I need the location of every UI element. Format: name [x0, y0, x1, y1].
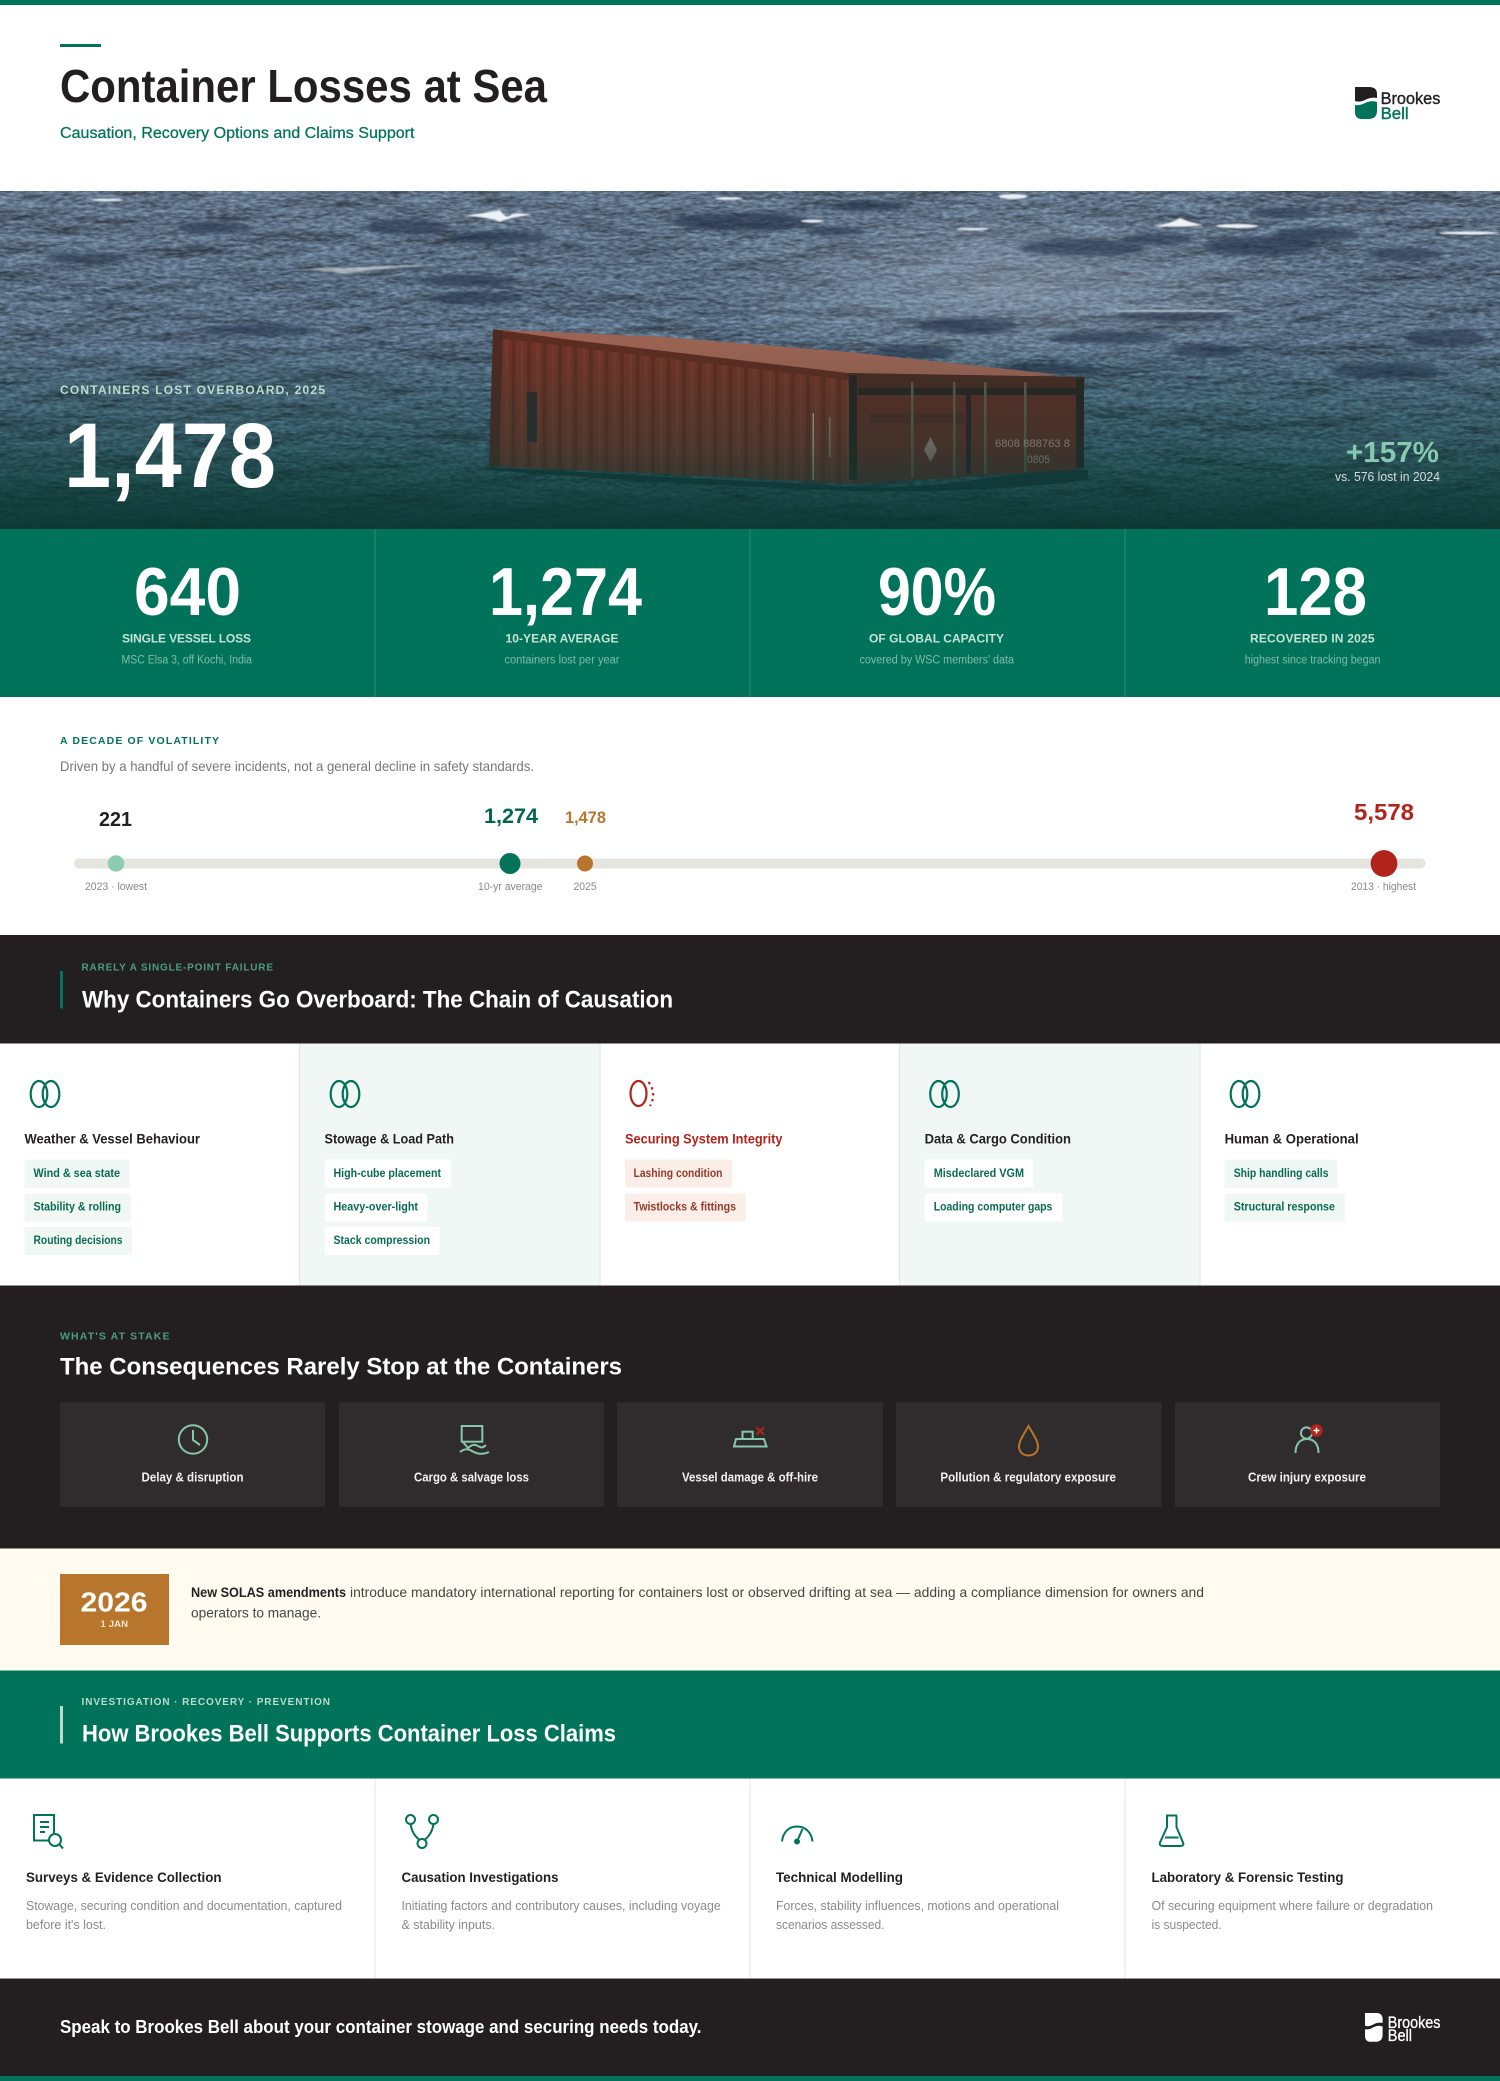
- service: laboratory and forensic testing: Of securing equipment where failure or degradation: [1152, 1898, 1433, 1913]
- heading: Why Containers Go Overboard: The Chain of Causation: [82, 986, 673, 1014]
- stat: single vessel loss: [122, 554, 253, 666]
- container: 0805: [1027, 454, 1050, 466]
- footer: [0, 1978, 1500, 2076]
- callout text: [191, 1584, 1204, 1620]
- sea grain: [0, 191, 1500, 529]
- logo: Brookes Bell white: Bell: [1388, 2027, 1412, 2045]
- marker: 2023 lowest: [85, 809, 147, 893]
- change note: vs. 576 lost in 2024: [1335, 469, 1440, 484]
- call to action: Speak to Brookes Bell about your container stowage and securing needs today.: [60, 2017, 702, 2037]
- service: surveys and evidence: Surveys & Evidence Collection: [26, 1869, 222, 1885]
- hero stat: year-on-year change: [1335, 437, 1440, 484]
- hero stat: containers lost overboard: [60, 383, 325, 507]
- top accent bar: [0, 0, 1500, 5]
- icon: clock: [179, 1425, 207, 1454]
- door centre gap: [966, 392, 971, 474]
- change figure: +157%: [1346, 437, 1439, 469]
- column: securing system integrity: Lashing condition: [634, 1168, 722, 1180]
- hero label: CONTAINERS LOST OVERBOARD, 2025: [60, 383, 325, 397]
- eyebrow: RARELY A SINGLE-POINT FAILURE: [82, 962, 273, 974]
- column: data and cargo condition: Loading computer gaps: [934, 1202, 1052, 1214]
- panel: decade of volatility: [60, 735, 1426, 893]
- panel: services: [0, 1778, 1500, 1978]
- card: cargo and salvage loss: [339, 1402, 604, 1507]
- corner post: [489, 329, 503, 466]
- service: causation investigations: Initiating factors and contributory causes, including voyage: [402, 1898, 721, 1913]
- card: crew injury exposure: [1175, 1402, 1440, 1507]
- column: securing system integrity: Twistlocks & fittings: [634, 1202, 736, 1214]
- stat: global capacity: covered by WSC members' data: [860, 654, 1015, 666]
- column: human and operational: Ship handling calls: [1234, 1168, 1328, 1180]
- callout text: introduce mandatory international reporting for containers lost or observed drifting at sea — adding a compliance dimension for owners and: [350, 1584, 1204, 1600]
- corner castings: [849, 375, 1084, 480]
- header accent bar: [60, 971, 63, 1008]
- service: surveys and evidence: [26, 1815, 342, 1932]
- card: crew injury exposure: Crew injury exposure: [1248, 1470, 1366, 1484]
- hero number: 1,478: [64, 405, 276, 507]
- marker: 2013 highest: [1351, 799, 1416, 893]
- container side wall: [489, 329, 852, 484]
- service: surveys and evidence: Stowage, securing condition and documentation, captured: [26, 1898, 342, 1913]
- marker: 10-year average: 1,274: [484, 804, 538, 828]
- stat: 10-year average: 1,274: [489, 554, 642, 630]
- stat: single vessel loss: 640: [134, 554, 241, 630]
- service: causation investigations: & stability inputs.: [402, 1917, 495, 1932]
- column: weather and vessel behaviour: [24, 1081, 201, 1255]
- icon: damaged vessel: [734, 1428, 766, 1446]
- door header: [848, 373, 1084, 389]
- column: human and operational: Human & Operational: [1225, 1130, 1359, 1146]
- marker: 2013 highest: 5,578: [1354, 799, 1414, 825]
- column: stowage and load path: Stowage & Load Path: [324, 1130, 454, 1146]
- door panel shade: [870, 413, 965, 423]
- door bar: [858, 388, 1078, 395]
- icon: document with magnifier: [34, 1815, 63, 1848]
- marker: 2013 highest: 2013 · highest: [1351, 881, 1416, 893]
- waterline: [489, 468, 1088, 492]
- column: human and operational: [1225, 1081, 1359, 1222]
- column: data and cargo condition: Misdeclared VGM: [934, 1168, 1024, 1180]
- stat: recovered: RECOVERED IN 2025: [1250, 632, 1375, 646]
- callout text: operators to manage.: [191, 1604, 321, 1620]
- section header: chain of causation: [0, 935, 1500, 1044]
- logo: Brookes Bell: Bell: [1381, 104, 1409, 123]
- callout text: New SOLAS amendments: [191, 1584, 346, 1600]
- icon: gauge: [782, 1826, 812, 1844]
- logo: Brookes Bell: [1355, 87, 1440, 123]
- service: laboratory and forensic testing: Laboratory & Forensic Testing: [1152, 1869, 1344, 1885]
- column: weather and vessel behaviour: Stability & rolling: [34, 1202, 121, 1214]
- column: securing system integrity: [625, 1081, 783, 1222]
- stats band: [0, 529, 1500, 697]
- stat: single vessel loss: MSC Elsa 3, off Kochi, India: [122, 654, 253, 666]
- section eyebrow: A DECADE OF VOLATILITY: [60, 735, 219, 747]
- title: Container Losses at Sea: [60, 60, 547, 112]
- icon: broken ring: [630, 1081, 653, 1106]
- card: delay and disruption: [60, 1402, 325, 1507]
- logo: Brookes Bell white: Brookes: [1388, 2014, 1440, 2032]
- column: human and operational: Structural response: [1234, 1202, 1335, 1214]
- service: surveys and evidence: before it's lost.: [26, 1917, 106, 1932]
- stat: recovered: 128: [1264, 554, 1367, 630]
- stat: 10-year average: [489, 554, 642, 666]
- card: vessel damage and off-hire: Vessel damage & off-hire: [682, 1470, 818, 1484]
- stat: global capacity: [860, 554, 1015, 666]
- column: stowage and load path: Heavy-over-light: [334, 1202, 418, 1214]
- icon: cargo in water: [460, 1426, 489, 1454]
- service: causation investigations: Causation Investigations: [402, 1869, 559, 1885]
- date badge: 1 JAN: [100, 1619, 128, 1630]
- dark swells: [46, 201, 1484, 379]
- logo: Brookes Bell: Brookes: [1381, 89, 1440, 108]
- door marking: [924, 437, 937, 462]
- callout: SOLAS amendments: [0, 1548, 1500, 1670]
- marker: 2025: [565, 808, 606, 893]
- icon: linked rings: [930, 1081, 959, 1107]
- service: laboratory and forensic testing: [1152, 1816, 1433, 1932]
- card: pollution and regulatory exposure: [896, 1402, 1162, 1507]
- header accent bar: [60, 1706, 63, 1744]
- column: securing system integrity: Securing System Integrity: [625, 1130, 783, 1146]
- eyebrow: INVESTIGATION · RECOVERY · PREVENTION: [82, 1697, 330, 1708]
- stat: recovered: highest since tracking began: [1245, 654, 1380, 666]
- icon: linked rings: [31, 1081, 59, 1107]
- card: cargo and salvage loss: Cargo & salvage loss: [414, 1470, 529, 1484]
- marker: 10-year average: [478, 804, 542, 893]
- card: pollution and regulatory exposure: Pollution & regulatory exposure: [940, 1470, 1116, 1484]
- header: [60, 44, 1440, 142]
- section header: how Brookes Bell supports claims: [0, 1670, 1500, 1778]
- service: technical modelling: scenarios assessed.: [776, 1917, 884, 1932]
- service: laboratory and forensic testing: is suspected.: [1152, 1917, 1222, 1932]
- icon: linked rings: [331, 1081, 359, 1107]
- stat: single vessel loss: SINGLE VESSEL LOSS: [122, 632, 251, 646]
- bottom accent bar: [0, 2076, 1500, 2081]
- column: stowage and load path: High-cube placement: [334, 1168, 441, 1180]
- container: [489, 329, 1088, 492]
- bottom fade: [0, 340, 1500, 529]
- marker: 2025: 1,478: [565, 808, 606, 827]
- date badge: [60, 1574, 169, 1645]
- card: vessel damage and off-hire: [617, 1402, 883, 1507]
- locking rods: [911, 382, 1026, 478]
- column: stowage and load path: [324, 1081, 454, 1255]
- range chart: [74, 799, 1426, 893]
- section note: Driven by a handful of severe incidents, not a general decline in safety standards.: [60, 758, 534, 774]
- column: data and cargo condition: [925, 1081, 1071, 1222]
- stat: 10-year average: 10-YEAR AVERAGE: [506, 632, 618, 646]
- icon: linked rings: [1231, 1081, 1259, 1107]
- service: technical modelling: [776, 1826, 1059, 1932]
- column: weather and vessel behaviour: Weather & Vessel Behaviour: [24, 1130, 201, 1146]
- title accent rule: [60, 44, 101, 47]
- container door end: [848, 373, 1084, 484]
- heading: The Consequences Rarely Stop at the Containers: [60, 1354, 622, 1380]
- side vent patch: [527, 392, 537, 442]
- column: stowage and load path: Stack compression: [334, 1235, 430, 1247]
- side streaks: [812, 413, 814, 480]
- stat: global capacity: 90%: [878, 554, 996, 630]
- column: data and cargo condition: Data & Cargo Condition: [925, 1130, 1071, 1146]
- icon: oil drop: [1019, 1426, 1038, 1456]
- marker: 2023 lowest: 2023 · lowest: [85, 881, 147, 893]
- column: weather and vessel behaviour: Wind & sea state: [34, 1168, 120, 1180]
- stat: 10-year average: containers lost per year: [504, 654, 620, 666]
- stat: global capacity: OF GLOBAL CAPACITY: [869, 632, 1004, 646]
- logo: Brookes Bell white: [1365, 2013, 1440, 2045]
- panel: chain of causation columns: [0, 1044, 1500, 1286]
- whitecaps: [91, 194, 1499, 312]
- icon: injured crew member: [1296, 1424, 1323, 1453]
- heading: How Brookes Bell Supports Container Loss Claims: [82, 1720, 616, 1748]
- sea sheen: [754, 216, 1264, 354]
- column: weather and vessel behaviour: Routing decisions: [34, 1235, 122, 1247]
- hero: container adrift at sea: [0, 191, 1500, 529]
- date badge: 2026: [80, 1586, 148, 1618]
- card: delay and disruption: Delay & disruption: [142, 1470, 244, 1484]
- service: technical modelling: Technical Modelling: [776, 1869, 903, 1885]
- eyebrow: WHAT'S AT STAKE: [60, 1330, 170, 1342]
- service: causation investigations: [402, 1815, 721, 1932]
- icon: flask: [1160, 1816, 1183, 1846]
- icon: causal tree: [406, 1815, 438, 1848]
- marker: 2023 lowest: 221: [99, 809, 132, 831]
- container: 6808 888763 8: [995, 438, 1070, 450]
- sea texture: [0, 191, 1500, 529]
- subtitle: Causation, Recovery Options and Claims Support: [60, 125, 415, 142]
- marker: 10-year average: 10-yr average: [478, 881, 542, 893]
- side rail: [497, 331, 848, 380]
- stat: recovered: [1245, 554, 1380, 666]
- container roof: [499, 330, 1062, 377]
- marker: 2025: 2025: [574, 881, 597, 893]
- service: technical modelling: Forces, stability influences, motions and operational: [776, 1898, 1059, 1913]
- panel: consequences: [0, 1286, 1500, 1548]
